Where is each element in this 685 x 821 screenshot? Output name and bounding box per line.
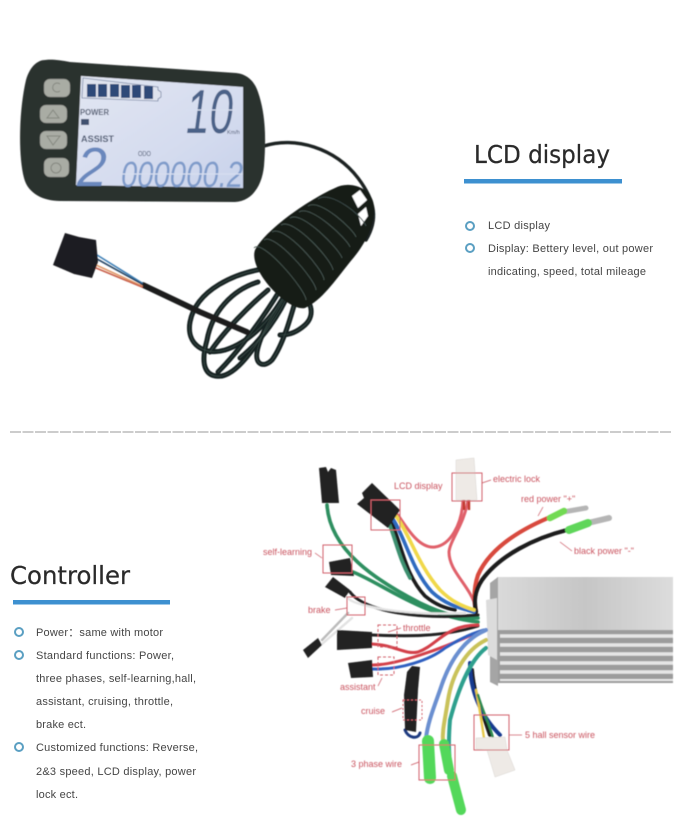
section divider bbox=[10, 431, 672, 433]
callout labels: cruise bbox=[361, 706, 385, 716]
controller housing bbox=[486, 577, 673, 686]
power level bar bbox=[81, 119, 89, 125]
heading underline bbox=[13, 600, 170, 604]
cable from display to coil bbox=[264, 143, 374, 240]
bullet list: Controller: Customized functions: Reverse, bbox=[36, 742, 198, 754]
LCD labels: POWER bbox=[80, 108, 109, 117]
bullet list: Controller: 2&3 speed, LCD display, power bbox=[36, 766, 196, 778]
photo: LCD display unit: Km/h bbox=[227, 130, 240, 136]
callout labels: 5 hall sensor wire bbox=[525, 730, 595, 740]
callout labels: LCD display bbox=[394, 481, 443, 491]
callout boxes bbox=[323, 473, 509, 780]
photo: LCD display unit: ASSIST bbox=[81, 134, 114, 145]
bullet list: LCD display: indicating, speed, total mileage bbox=[488, 266, 646, 278]
callout labels: 3 phase wire bbox=[351, 759, 402, 769]
side buttons bbox=[40, 79, 70, 177]
green power terminals bbox=[550, 508, 609, 530]
bullet list: Controller: assistant, cruising, throttle, bbox=[36, 696, 173, 708]
connector plug bbox=[53, 233, 98, 278]
bullet list: LCD display bbox=[466, 220, 653, 278]
callout labels: electric lock bbox=[493, 474, 541, 484]
button icons bbox=[47, 83, 61, 173]
callout labels: red power "+" bbox=[521, 494, 575, 504]
display housing bbox=[20, 60, 265, 202]
assist level reading: 2 bbox=[76, 136, 107, 198]
callout labels bbox=[263, 474, 634, 769]
callout labels: self-learning bbox=[263, 547, 312, 557]
white lock and hall connectors bbox=[456, 458, 515, 777]
black connectors bbox=[303, 467, 420, 732]
bullet list: Controller: Standard functions: Power, bbox=[36, 650, 174, 662]
top wires bbox=[322, 500, 567, 644]
heading: Controller: Controller bbox=[10, 561, 131, 590]
callout labels: throttle bbox=[403, 623, 431, 633]
heading underline bbox=[464, 179, 622, 184]
bullet list: Controller bbox=[15, 627, 198, 801]
LCD screen bbox=[76, 76, 243, 188]
coiled cable loops bbox=[189, 268, 311, 376]
photo: controller wiring diagram bbox=[263, 458, 673, 810]
bullet list: Controller: three phases, self-learning,hall, bbox=[36, 673, 196, 685]
callout labels: brake bbox=[308, 605, 331, 615]
coil body bbox=[254, 185, 374, 308]
battery gauge bbox=[82, 78, 161, 101]
photo: LCD display unit bbox=[20, 60, 374, 376]
speed reading: 10 bbox=[186, 78, 233, 147]
callout leader lines bbox=[315, 480, 572, 765]
callout labels: black power "-" bbox=[574, 546, 634, 556]
lower wires bbox=[372, 625, 500, 775]
bullet list: Controller: brake ect. bbox=[36, 719, 86, 731]
bullet list: LCD display: Display: Bettery level, out power bbox=[488, 243, 653, 255]
bullet list: Controller: lock ect. bbox=[36, 789, 78, 801]
green phase sleeves bbox=[428, 741, 461, 810]
connector wires bbox=[96, 255, 142, 287]
heading: LCD display: LCD display bbox=[474, 140, 610, 169]
coil gaps bbox=[352, 190, 368, 226]
bullet list: LCD display: LCD display bbox=[488, 220, 550, 232]
callout labels: assistant bbox=[340, 682, 376, 692]
segment gaps on digits bbox=[120, 110, 243, 174]
mileage reading: 000000.2 bbox=[121, 154, 243, 195]
sleeve cable bbox=[143, 285, 247, 332]
coil ring highlights bbox=[254, 197, 366, 300]
bullet list: Controller: Power：same with motor bbox=[36, 627, 163, 639]
photo: LCD display unit: ODO bbox=[138, 151, 151, 158]
